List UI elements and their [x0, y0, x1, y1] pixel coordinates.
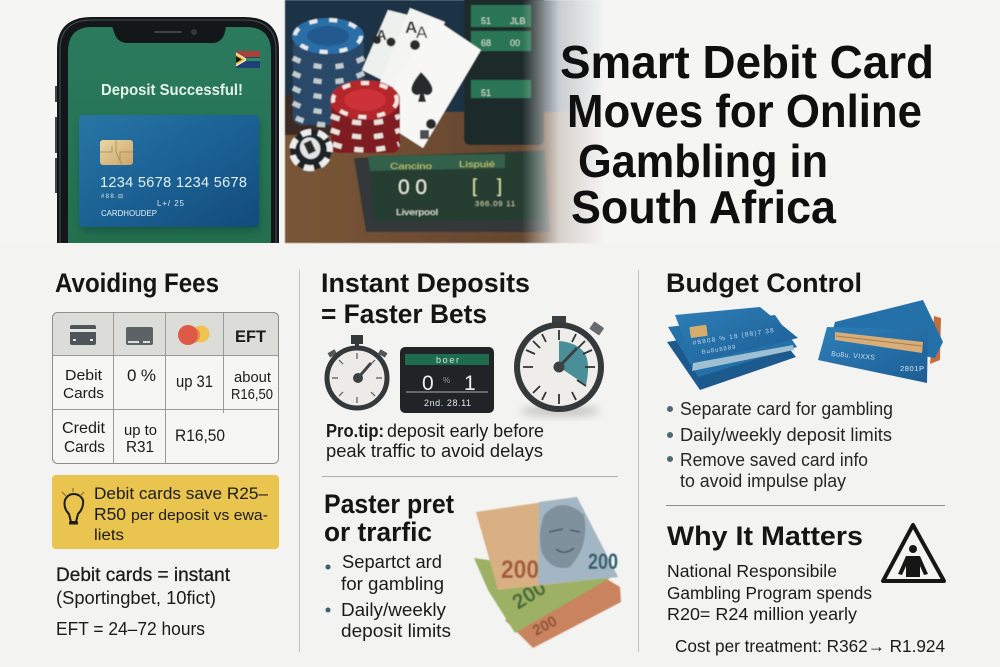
icon: card network logo	[178, 325, 210, 345]
callout: debit card savings: per deposit vs ewa-	[131, 507, 268, 524]
icon: stack of blue cards, chip side: Bu8u8889	[701, 345, 737, 356]
fee comparison table	[52, 312, 279, 464]
bullet list	[326, 552, 451, 641]
text: EFT: EFT	[235, 327, 267, 346]
text: national program spend: R20= R24 million yearly	[667, 604, 857, 624]
callout: debit card savings: liets	[94, 527, 124, 544]
heading: avoiding fees: Avoiding Fees	[55, 268, 219, 298]
icon: top-right betting screen: JLB	[510, 16, 526, 26]
phone screen	[68, 27, 271, 243]
icon: score tablet	[354, 150, 550, 232]
icon: score tablet: 366.09 11	[475, 199, 515, 208]
text: cost per treatment: Cost per treatment: R362→ R1.924	[675, 636, 945, 656]
icon: score tablet: 00	[398, 176, 427, 199]
icon: score tablet: Cancino	[390, 161, 432, 171]
title	[560, 36, 934, 233]
icon: stack of blue cards, strip side	[818, 300, 943, 383]
icon: rand banknotes: 200	[501, 556, 539, 584]
icon: single black and white chip	[284, 123, 338, 177]
icon: rand banknotes: 200	[588, 549, 618, 574]
icon: rand banknotes: 200	[508, 576, 550, 614]
icon: top-right betting screen: 68	[481, 38, 491, 48]
bullet list: deposit limits	[341, 621, 451, 641]
text: card number: 1234 5678 1234 5678	[100, 175, 247, 191]
text: pro tip	[326, 421, 544, 461]
icon: warning triangle with person	[883, 525, 944, 581]
icon: stack of blue cards, strip side: Bu8u. VIXXS	[831, 351, 876, 362]
heading: paster pret or trarfic: Paster pret	[324, 489, 454, 519]
scoreboard: 2nd. 28.11	[424, 398, 471, 408]
text: processing times: (Sportingbet, 10fict)	[56, 588, 216, 608]
title: Gambling in	[578, 135, 828, 187]
heading: instant deposits	[321, 268, 530, 329]
heading: instant deposits: = Faster Bets	[321, 299, 487, 329]
title: Moves for Online	[567, 85, 922, 137]
table row: debit cards: 0 %	[127, 366, 156, 385]
text: deposit successful: Deposit Successful!	[101, 82, 243, 99]
icon: top-right betting screen	[464, 0, 544, 145]
heading: paster pret or trarfic: or trarfic	[324, 517, 432, 547]
phone notch	[112, 26, 226, 43]
bullet list: to avoid impulse play	[680, 471, 846, 491]
bullet list: Daily/weekly	[341, 600, 446, 620]
table row: credit cards: up to	[124, 422, 157, 439]
text: pro tip: deposit early before	[387, 421, 544, 441]
scoreboard: %	[443, 376, 450, 385]
bank card: L+/ 25	[157, 199, 185, 208]
text: national program spend	[667, 561, 872, 624]
heading: paster pret or trarfic	[324, 489, 454, 547]
title: South Africa	[571, 181, 836, 233]
icon: playing cards: A	[376, 27, 387, 44]
icon: red chip stack	[330, 80, 400, 153]
bank card: #88.⊟	[101, 194, 123, 200]
icon: rand banknotes: 200	[530, 613, 560, 640]
icon: stack of blue cards, chip side	[667, 307, 798, 390]
text: processing times: Debit cards = instant	[56, 565, 231, 586]
panel: instant deposits	[321, 268, 621, 648]
table row: debit cards: R16,50	[231, 386, 273, 403]
bank card	[79, 115, 259, 231]
text: pro tip: peak traffic to avoid delays	[326, 441, 543, 461]
bullet list: Separate card for gambling	[680, 399, 893, 419]
icon: stack of blue cards, strip side: 2801P	[900, 364, 924, 373]
icon: top-right betting screen: 00	[510, 38, 520, 48]
icon: playing cards: A	[405, 18, 417, 37]
bullet list: Remove saved card info	[680, 450, 868, 470]
table row: credit cards: Cards	[64, 439, 105, 456]
icon: blue chip stack	[292, 18, 364, 125]
scoreboard: boer	[436, 355, 459, 365]
bullet list: Daily/weekly deposit limits	[680, 425, 892, 445]
icon: stack of blue cards, chip side: #8808 % 18 (88)7 38	[692, 327, 775, 347]
text: pro tip: Pro.tip:	[326, 421, 384, 441]
panel: budget control	[666, 268, 945, 656]
callout: debit card savings	[52, 475, 279, 549]
scoreboard: 1	[464, 372, 476, 395]
icon: small stopwatch	[327, 335, 387, 408]
icon: top-right betting screen: 51	[481, 16, 491, 26]
icon: large stopwatch with shaded segment	[517, 316, 604, 417]
callout text: Debit cards save R25–	[94, 485, 269, 503]
heading: instant deposits: Instant Deposits	[321, 268, 530, 298]
icon: card chip	[100, 140, 133, 165]
icon: light bulb	[62, 488, 84, 523]
icon: top-right betting screen: 51	[481, 88, 491, 98]
table row: debit cards	[63, 366, 273, 403]
title: Smart Debit Card	[560, 36, 934, 88]
icon: score tablet: [ ]	[472, 176, 502, 196]
hero photo: chips, cards and scoreboards	[284, 0, 605, 243]
table row: credit cards: Credit	[62, 420, 106, 437]
bullet list: Separtct ard	[342, 552, 442, 572]
heading: budget control: Budget Control	[666, 268, 862, 298]
heading: why it matters: Why It Matters	[667, 521, 863, 551]
scoreboard	[400, 347, 494, 413]
icon: grey card	[126, 327, 153, 345]
bullet list: for gambling	[341, 574, 444, 594]
callout: debit card savings: R50	[94, 504, 126, 524]
icon: playing cards: A	[416, 23, 428, 42]
table row: credit cards	[62, 420, 225, 456]
text: processing times: EFT = 24–72 hours	[56, 618, 205, 639]
table row: credit cards: R31	[126, 439, 154, 456]
scoreboard: 0	[422, 372, 434, 395]
bank card: CARDHOUDEP	[101, 209, 157, 218]
text: national program spend: Gambling Program spends	[667, 583, 872, 603]
hero phone: deposit success screen	[55, 17, 279, 243]
icon: card	[70, 325, 96, 345]
icon: rand banknotes	[474, 497, 621, 648]
table row: debit cards: up 31	[176, 373, 213, 391]
icon: score tablet: Liverpool	[396, 207, 438, 217]
table row: debit cards: about	[234, 370, 271, 386]
table row: credit cards: R16,50	[175, 426, 225, 445]
icon: playing cards	[362, 8, 481, 148]
icon: South African flag	[236, 51, 260, 68]
bullet list	[667, 399, 893, 491]
panel: avoiding fees	[52, 268, 279, 639]
table row: debit cards: Debit	[65, 367, 103, 384]
text: national program spend: National Responsibile	[667, 561, 837, 581]
icon: score tablet: Lispuié	[459, 159, 495, 169]
text: processing times	[56, 565, 231, 639]
table row: debit cards: Cards	[63, 385, 104, 402]
